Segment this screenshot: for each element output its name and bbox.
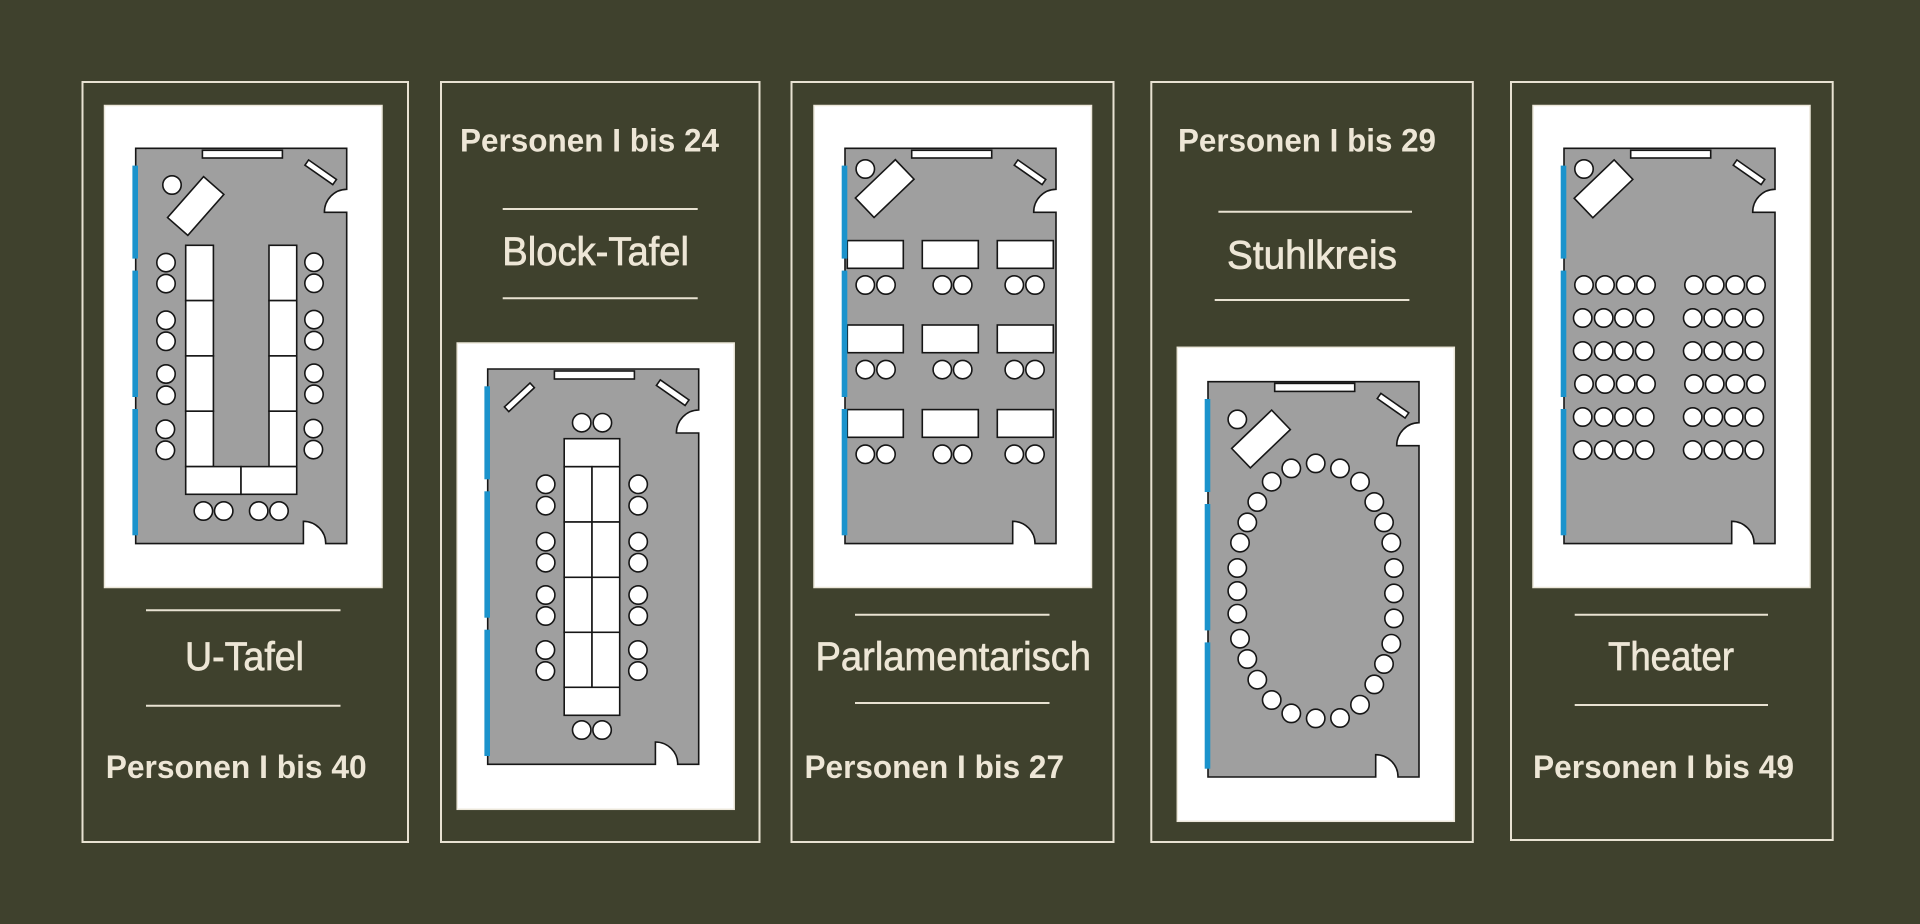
panel: Parlamentarisch bbox=[792, 82, 1114, 842]
capacity: Personen I bis 29 bbox=[1178, 123, 1436, 159]
panel frame bbox=[1511, 82, 1833, 840]
panel frame bbox=[792, 82, 1114, 842]
panel frame bbox=[441, 82, 760, 842]
whiteboard bbox=[1275, 383, 1355, 391]
white plan background bbox=[104, 106, 382, 588]
projection screen bbox=[305, 160, 336, 185]
capacity: Personen I bis 24 bbox=[460, 123, 719, 159]
whiteboard bbox=[202, 150, 282, 158]
floor plan: Stuhlkreis bbox=[1205, 382, 1419, 777]
windows bbox=[842, 166, 847, 535]
capacity: Personen I bis 27 bbox=[804, 749, 1064, 785]
windows bbox=[484, 386, 490, 756]
heading: Parlamentarisch bbox=[816, 635, 1091, 679]
whiteboard bbox=[912, 150, 992, 158]
room outline with doors bbox=[845, 148, 1056, 544]
heading: Stuhlkreis bbox=[1227, 234, 1397, 278]
presenter chair bbox=[163, 176, 181, 194]
presenter chair bbox=[856, 160, 874, 178]
floor plan: U-Tafel bbox=[132, 148, 347, 544]
whiteboard bbox=[1631, 150, 1711, 158]
U-shaped tables bbox=[186, 245, 297, 494]
projection screen bbox=[1733, 160, 1765, 185]
chairs bbox=[536, 414, 647, 739]
left projection screen bbox=[504, 383, 534, 412]
panel: Stuhlkreis bbox=[1151, 82, 1473, 842]
heading: Theater bbox=[1608, 635, 1734, 679]
panel: U-Tafel bbox=[82, 82, 408, 842]
whiteboard bbox=[554, 371, 634, 379]
heading: U-Tafel bbox=[185, 635, 304, 679]
panel: Theater bbox=[1511, 82, 1833, 840]
projection screen bbox=[1014, 160, 1046, 185]
white plan background bbox=[1533, 106, 1810, 588]
floor plan: Theater bbox=[1561, 148, 1775, 544]
presenter desk bbox=[1574, 160, 1633, 218]
chairs bbox=[156, 253, 323, 520]
room outline with doors bbox=[1564, 148, 1775, 544]
room outline with doors bbox=[1208, 382, 1419, 777]
panel: Block-Tafel bbox=[441, 82, 760, 842]
presenter desk bbox=[855, 160, 914, 218]
white plan background bbox=[457, 343, 734, 809]
chairs bbox=[856, 276, 1044, 464]
floor plan: Block-Tafel bbox=[484, 369, 699, 764]
heading: Block-Tafel bbox=[502, 230, 689, 274]
windows bbox=[1561, 166, 1566, 535]
capacity: Personen I bis 40 bbox=[106, 749, 367, 785]
presenter chair bbox=[1575, 160, 1593, 178]
floor plan: Parlamentarisch bbox=[842, 148, 1056, 544]
presenter chair bbox=[1228, 410, 1246, 429]
block table bbox=[564, 439, 620, 715]
white plan background bbox=[814, 106, 1092, 588]
capacity: Personen I bis 49 bbox=[1533, 749, 1794, 785]
windows bbox=[1205, 399, 1210, 769]
presenter desk bbox=[168, 177, 224, 235]
white plan background bbox=[1177, 347, 1454, 821]
panel frame bbox=[82, 82, 408, 842]
chair rows bbox=[1574, 276, 1765, 459]
panel frame bbox=[1151, 82, 1473, 842]
windows bbox=[132, 166, 138, 535]
room outline with doors bbox=[488, 369, 699, 764]
chair circle bbox=[1228, 454, 1403, 728]
right projection screen bbox=[656, 380, 689, 406]
presenter desk bbox=[1232, 410, 1290, 468]
tables bbox=[847, 241, 1053, 437]
projection screen bbox=[1377, 393, 1409, 418]
room outline with doors bbox=[136, 148, 347, 544]
